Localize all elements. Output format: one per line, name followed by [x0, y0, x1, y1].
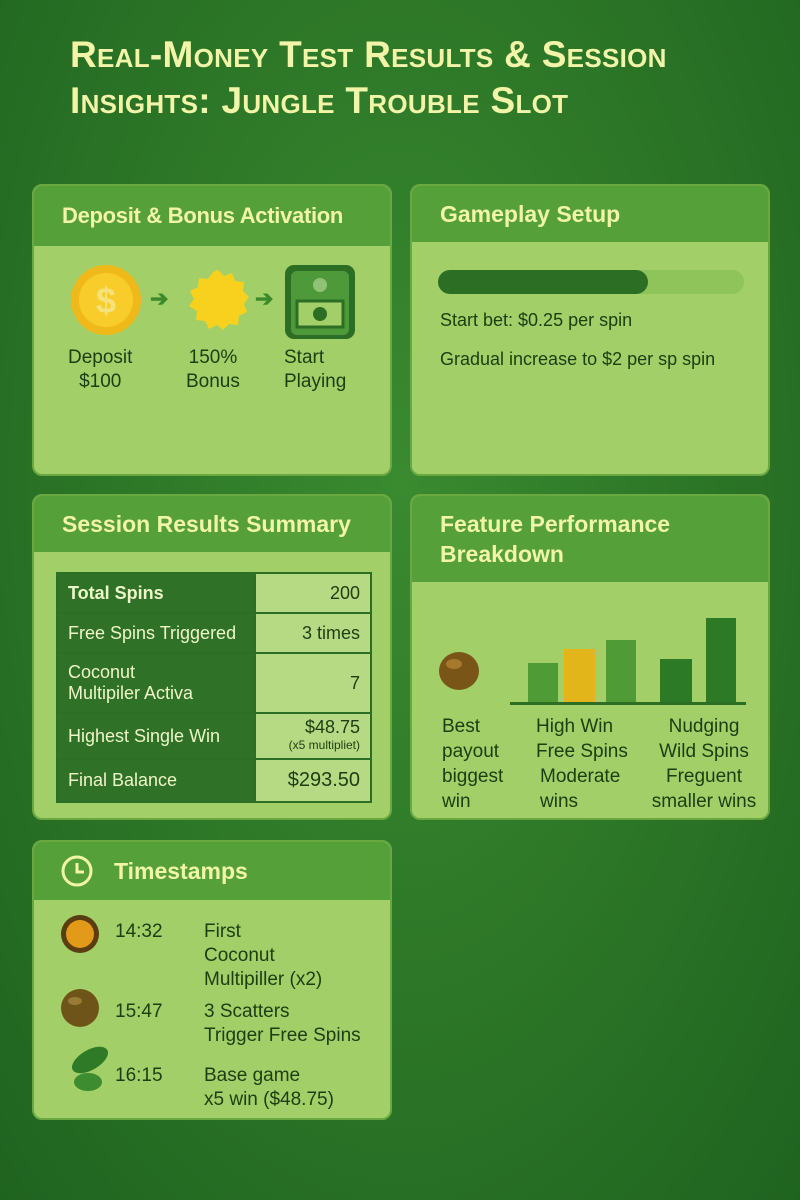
- table: Multipiler Activa: [68, 683, 193, 703]
- icon: coconut: [439, 652, 479, 690]
- label: high win free spins: Free Spins: [536, 741, 628, 762]
- heading: [412, 496, 768, 582]
- label: best payout: payout: [442, 741, 499, 762]
- heading: [34, 496, 390, 552]
- label: start playing: Start: [284, 347, 324, 368]
- label: best payout: Best: [442, 716, 480, 737]
- arrow: ➔: [255, 286, 273, 311]
- table: Free Spins Triggered: [68, 622, 236, 642]
- label: deposit: Deposit: [68, 347, 132, 368]
- label: nudging wild spins: Nudging: [669, 716, 739, 737]
- label: high win free spins: High Win: [536, 716, 613, 737]
- icon: slot machine: [285, 265, 355, 339]
- icon: coin: $: [96, 280, 116, 321]
- label: deposit: [68, 347, 132, 392]
- entry 1: [115, 921, 322, 990]
- table: 200: [330, 582, 360, 602]
- heading: [34, 842, 390, 900]
- panel: timestamps: Trigger Free Spins: [204, 1025, 361, 1046]
- table: [56, 572, 372, 803]
- label: nudging wild spins: Freguent: [666, 766, 742, 787]
- table: $293.50: [288, 769, 360, 791]
- label: start playing: [284, 347, 346, 392]
- panel: feature performance: [410, 494, 770, 820]
- title: Real-Money Test Results & Session: [70, 34, 667, 75]
- panel: timestamps: [32, 840, 392, 1120]
- heading: Timestamps: [114, 858, 248, 884]
- icon: leaves: [72, 1046, 108, 1091]
- label: deposit: $100: [79, 371, 121, 392]
- panel: timestamps: 15:47: [115, 1001, 163, 1022]
- icon: coin: [71, 265, 141, 335]
- progress bar: [438, 270, 744, 294]
- table: Total Spins: [68, 582, 164, 602]
- title: [70, 34, 667, 121]
- table: (x5 multipliet): [289, 738, 360, 752]
- text: increase: Gradual increase to $2 per sp spin: [440, 349, 715, 369]
- table: $48.75: [305, 717, 360, 737]
- icon: coin orange: [61, 915, 99, 953]
- arrow: ➔: [150, 286, 168, 311]
- heading: Breakdown: [440, 541, 564, 567]
- label: high win free spins: Moderate: [540, 766, 620, 787]
- panel: session results: [32, 494, 392, 820]
- table: 7: [350, 672, 360, 692]
- heading: [412, 186, 768, 242]
- panel: timestamps: 3 Scatters: [204, 1001, 290, 1022]
- label: bonus: [186, 347, 240, 392]
- title: Insights: Jungle Trouble Slot: [70, 80, 568, 121]
- label: start playing: Playing: [284, 371, 346, 392]
- label: high win free spins: [536, 716, 628, 812]
- icon: coconut: [61, 989, 99, 1027]
- label: nudging wild spins: [652, 716, 756, 812]
- panel: timestamps: Coconut: [204, 945, 275, 966]
- panel: timestamps: 16:15: [115, 1065, 163, 1086]
- heading: Session Results Summary: [62, 510, 351, 536]
- panel: timestamps: 14:32: [115, 921, 163, 942]
- heading: Feature Performance: [440, 511, 670, 537]
- heading: Deposit & Bonus Activation: [62, 203, 343, 228]
- label: nudging wild spins: Wild Spins: [659, 741, 749, 762]
- panel: timestamps: x5 win ($48.75): [204, 1089, 334, 1110]
- heading: [34, 186, 390, 246]
- table: Highest Single Win: [68, 726, 220, 746]
- panel: timestamps: Multipiller (x2): [204, 969, 322, 990]
- panel: gameplay setup: [410, 184, 770, 476]
- entry 2: [115, 1001, 361, 1046]
- table: Coconut: [68, 662, 135, 682]
- label: nudging wild spins: smaller wins: [652, 791, 756, 812]
- label: best payout: [442, 716, 504, 812]
- table: Final Balance: [68, 770, 177, 790]
- panel: deposit & bonus: [32, 184, 392, 476]
- entry 3: [115, 1065, 334, 1110]
- label: bonus: Bonus: [186, 371, 240, 392]
- label: best payout: win: [442, 791, 471, 812]
- table: 3 times: [302, 622, 360, 642]
- label: bonus: 150%: [189, 347, 237, 368]
- text: start bet: Start bet: $0.25 per spin: [440, 310, 632, 330]
- panel: timestamps: Base game: [204, 1065, 300, 1086]
- bar chart: [510, 618, 746, 705]
- heading: Gameplay Setup: [440, 200, 620, 226]
- panel: timestamps: First: [204, 921, 241, 942]
- label: best payout: biggest: [442, 766, 503, 787]
- label: high win free spins: wins: [540, 791, 578, 812]
- icon: bonus burst: [189, 270, 249, 330]
